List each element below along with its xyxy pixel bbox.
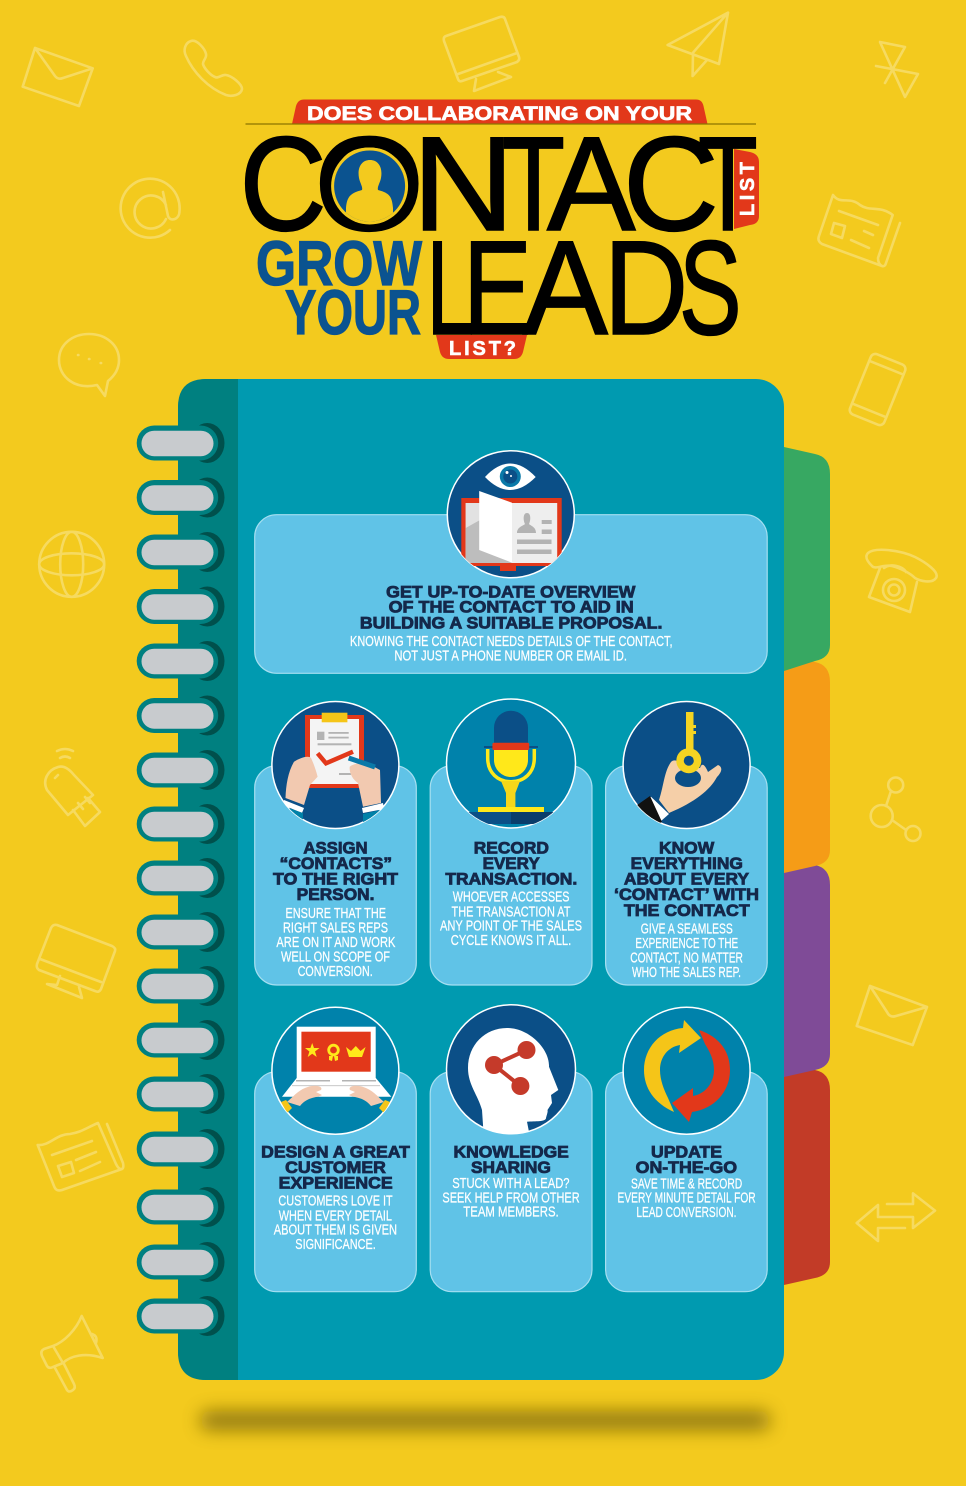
panel: know everything [606, 702, 767, 985]
bottom tab: list? [436, 335, 527, 360]
icon: rotary telephone [866, 550, 937, 612]
heading: ‘CONTACT’ WITH [614, 885, 759, 904]
heading: BUILDING A SUITABLE PROPOSAL. [360, 613, 662, 632]
heading: THE CONTACT [624, 901, 750, 920]
word: contact: O [314, 110, 424, 259]
icon: head with share symbol [446, 1005, 576, 1140]
tab: purple [784, 858, 830, 1077]
icon: chat bubble [59, 334, 119, 396]
tab: red [784, 1063, 830, 1285]
icon: hands with clipboard [272, 702, 399, 835]
notebook cover [178, 379, 784, 1380]
heading: KNOWLEDGE [454, 1143, 569, 1162]
word: leads [426, 212, 742, 363]
heading: SHARING [471, 1158, 551, 1177]
body text: ANY POINT OF THE SALES [440, 918, 582, 935]
icon: computer monitor left [37, 925, 115, 998]
heading: RECORD [474, 838, 549, 857]
body text: SEEK HELP FROM OTHER [442, 1189, 580, 1206]
heading: UPDATE [651, 1143, 722, 1162]
heading [636, 1143, 737, 1177]
body text: SAVE TIME & RECORD [631, 1175, 742, 1192]
heading [445, 838, 577, 889]
icon: megaphone [41, 1316, 103, 1392]
notebook shadow [200, 1411, 770, 1430]
body text: WELL ON SCOPE OF [281, 948, 390, 965]
body text: THE TRANSACTION AT [452, 903, 570, 920]
body text: NOT JUST A PHONE NUMBER OR EMAIL ID. [394, 648, 627, 665]
body text: CONTACT, NO MATTER [630, 950, 743, 967]
icon: newspaper left [38, 1123, 123, 1190]
body text: CUSTOMERS LOVE IT [278, 1193, 393, 1210]
icon: bluetooth [876, 42, 918, 97]
panel: knowledge sharing [430, 1005, 592, 1292]
icon: globe [39, 532, 104, 597]
word: leads: L [426, 213, 474, 363]
banner: does collaborating on your [246, 100, 756, 125]
word: contact: A [547, 109, 636, 259]
tab: orange [784, 655, 830, 873]
icon: mobile phone [848, 352, 907, 427]
body text [274, 1193, 397, 1253]
body text: ABOUT THEM IS GIVEN [274, 1222, 397, 1239]
body text: CYCLE KNOWS IT ALL. [451, 932, 571, 949]
icon: envelope top left [23, 48, 93, 106]
bottom tab: list?: LIST? [449, 338, 516, 360]
heading [360, 582, 662, 632]
body text: CONVERSION. [298, 963, 373, 980]
notebook colored tabs [784, 447, 830, 1285]
body text [618, 1175, 756, 1221]
body text: KNOWING THE CONTACT NEEDS DETAILS OF THE CONTACT, [350, 633, 673, 650]
body text: STUCK WITH A LEAD? [452, 1175, 570, 1192]
body text: TEAM MEMBERS. [463, 1204, 559, 1221]
heading: ABOUT EVERY [624, 870, 750, 889]
word: leads: E [463, 214, 532, 363]
words: grow your: YOUR [285, 278, 421, 348]
body text: WHOEVER ACCESSES [453, 889, 570, 906]
words: grow your [256, 229, 422, 348]
icon: contact person in the letter O [331, 148, 408, 224]
body text [276, 905, 395, 980]
heading: PERSON. [297, 885, 374, 904]
icon: eye over open contact card [447, 451, 574, 578]
body text [350, 633, 673, 665]
body text: RIGHT SALES REPS [283, 919, 388, 936]
body text: WHO THE SALES REP. [632, 964, 741, 981]
panel: overview [255, 451, 767, 673]
body text: EXPERIENCE TO THE [635, 935, 738, 952]
icon: paper plane [668, 13, 728, 76]
tab: green [784, 447, 830, 671]
spiral binding rings [137, 423, 224, 1336]
heading: CUSTOMER [285, 1158, 386, 1177]
heading: DESIGN A GREAT [261, 1143, 411, 1162]
icon: at sign [121, 179, 180, 238]
heading: ON-THE-GO [636, 1158, 737, 1177]
heading: KNOW [659, 838, 715, 857]
heading: TRANSACTION. [445, 870, 577, 889]
title block [240, 100, 759, 363]
icon: two-way arrows [857, 1193, 935, 1241]
heading: EVERYTHING [631, 854, 743, 873]
panel: record every transaction [430, 699, 592, 985]
heading: ASSIGN [303, 838, 368, 857]
icon: envelope right [857, 986, 927, 1045]
heading [273, 838, 399, 904]
body text: GIVE A SEAMLESS [641, 921, 733, 938]
heading: TO THE RIGHT [273, 870, 399, 889]
icon: telephone handset [185, 41, 242, 96]
panel: update on the go [606, 1007, 767, 1292]
body text [630, 921, 743, 981]
word: contact: C [240, 110, 327, 259]
icon: newspaper right [818, 195, 900, 266]
panel: assign contacts [255, 702, 416, 985]
body text: LEAD CONVERSION. [636, 1204, 736, 1221]
icon: share nodes [871, 778, 920, 841]
icon: computer monitor top [444, 17, 519, 91]
heading: OF THE CONTACT TO AID IN [389, 598, 634, 617]
word: leads: D [604, 213, 688, 363]
heading: “CONTACTS” [280, 854, 392, 873]
heading [614, 838, 759, 920]
word: contact [240, 109, 758, 259]
body text: WHEN EVERY DETAIL [279, 1207, 392, 1224]
word: leads: A [523, 213, 608, 363]
word: contact: T [502, 110, 565, 259]
icon: laptop with hands [272, 1007, 399, 1134]
body text: SIGNIFICANCE. [295, 1236, 376, 1253]
words: grow your: GROW [256, 229, 422, 299]
icon: microphone [440, 699, 581, 828]
body text: EVERY MINUTE DETAIL FOR [618, 1190, 756, 1207]
banner: does collaborating on your: DOES COLLABORATING ON YOUR [307, 103, 692, 125]
word: contact: C [623, 109, 719, 259]
body text [440, 889, 582, 949]
word: contact: T [698, 109, 758, 259]
icon: circular refresh arrows [623, 1007, 750, 1134]
body text: ARE ON IT AND WORK [276, 934, 395, 951]
icon: usb stick [45, 749, 100, 826]
side tab: list [734, 149, 759, 229]
word: contact: N [412, 110, 515, 259]
heading [261, 1143, 411, 1193]
heading: GET UP-TO-DATE OVERVIEW [386, 582, 636, 601]
body text: ENSURE THAT THE [286, 905, 386, 922]
side tab: list: LIST [737, 162, 759, 216]
panel: design customer experience [255, 1007, 416, 1292]
heading: EVERY [483, 854, 540, 873]
word: leads: S [679, 212, 742, 363]
heading [454, 1143, 569, 1177]
heading: EXPERIENCE [279, 1174, 393, 1193]
icon: hand holding key [623, 702, 750, 830]
body text [442, 1175, 580, 1221]
